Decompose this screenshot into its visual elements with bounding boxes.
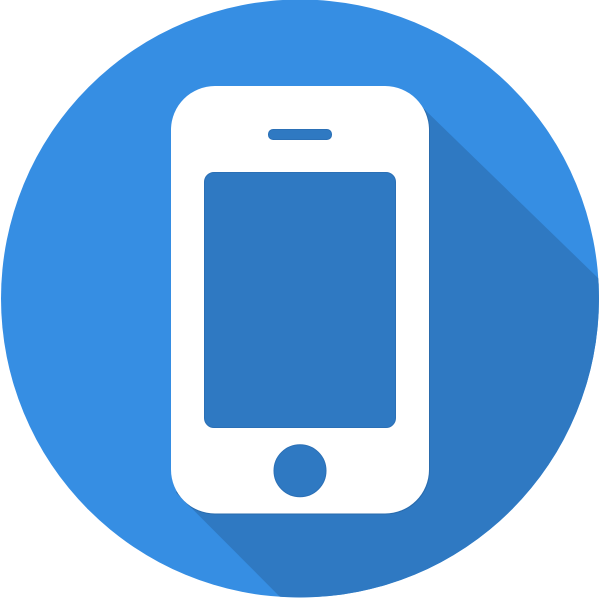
home button (274, 445, 326, 497)
icon: phone (171, 86, 430, 514)
screen (204, 172, 396, 428)
speaker slot (268, 130, 332, 140)
phone edge shade (171, 86, 430, 514)
phone body (171, 86, 429, 514)
long shadow (176, 97, 600, 600)
